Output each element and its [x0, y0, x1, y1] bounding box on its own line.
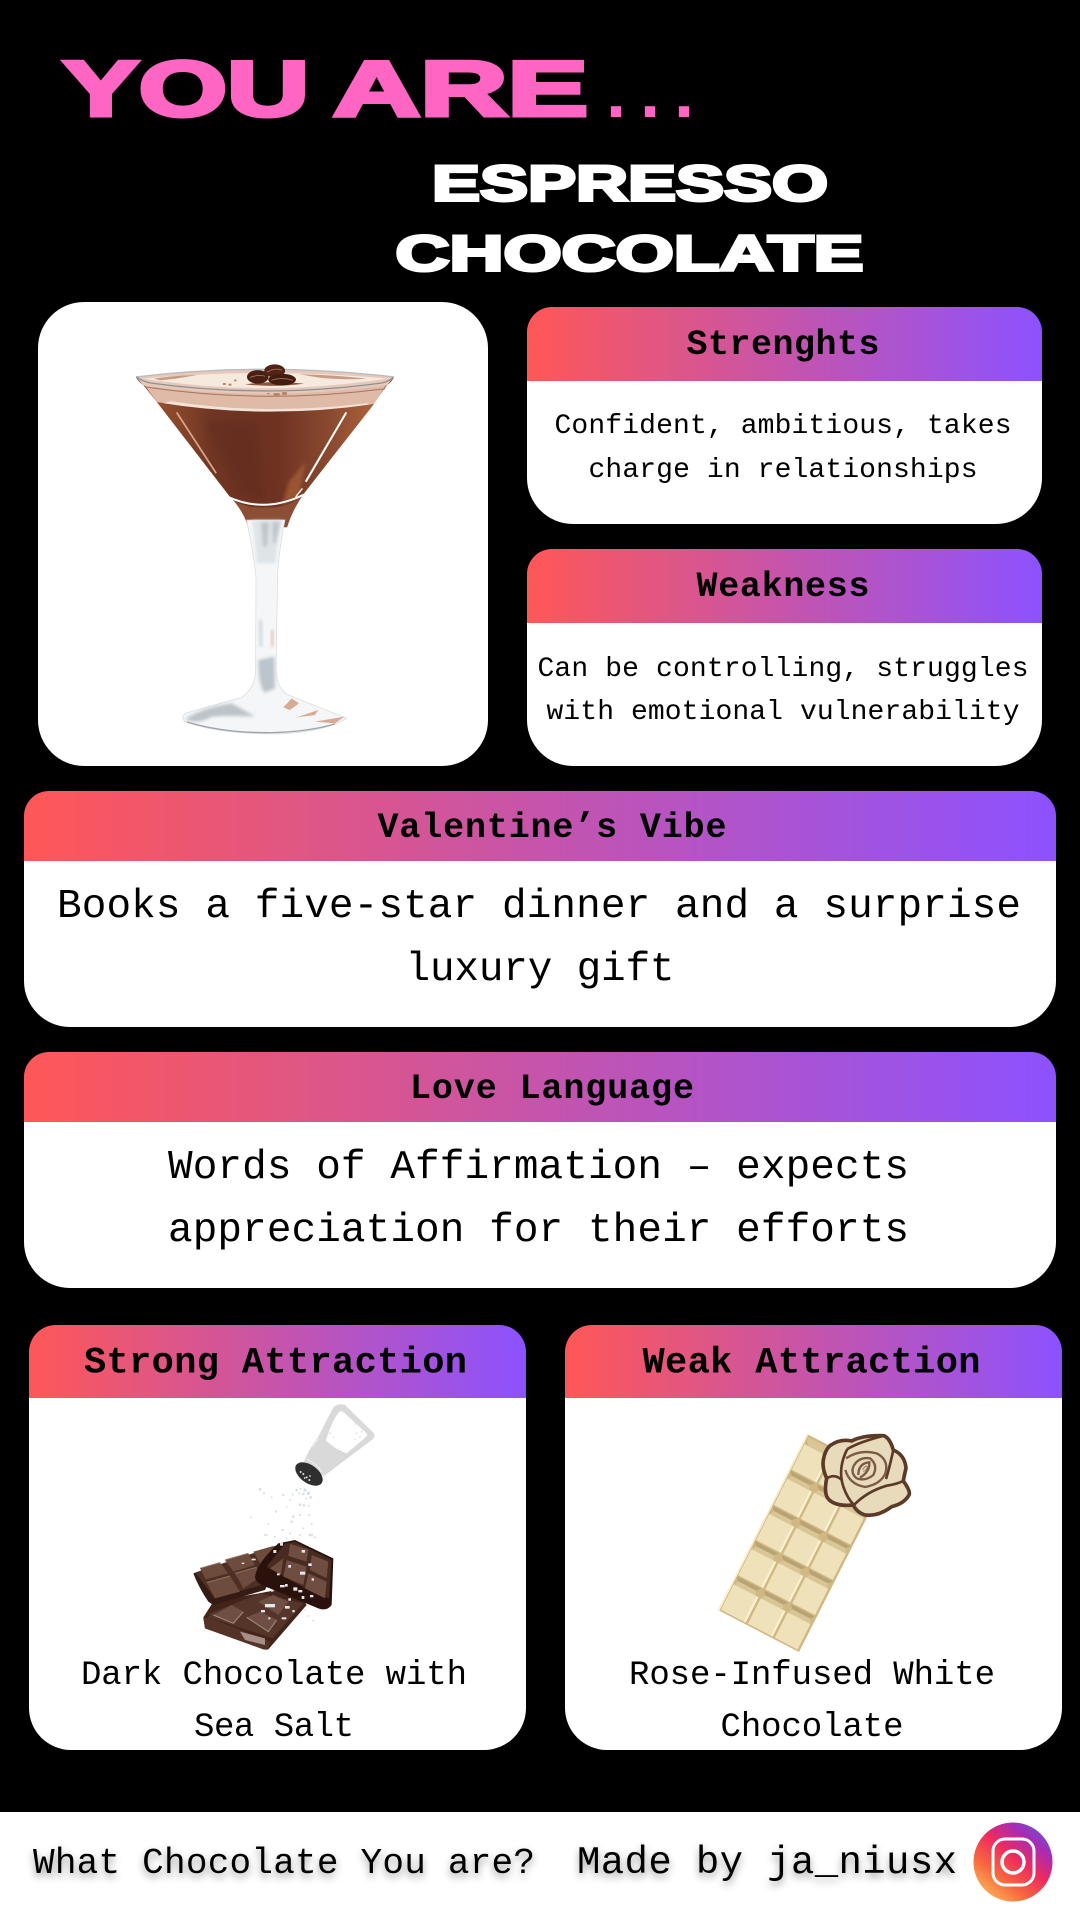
panel header: weak attraction [565, 1325, 1062, 1398]
footer text: quiz title: What Chocolate You are? [33, 1843, 535, 1884]
text: strengths body: Confident, ambitious, takes [554, 411, 1012, 442]
title: you are: YOU [63, 44, 309, 132]
icon: dark chocolate bars [193, 1532, 333, 1650]
icon: white chocolate bar [718, 1434, 888, 1652]
text: weakness body: Can be controlling, struggles [538, 654, 1028, 685]
text: weak attraction body: Rose-Infused White [629, 1657, 995, 1695]
heading: valentine's vibe: Valentine’s Vibe [378, 808, 726, 848]
panel: strong attraction [29, 1325, 526, 1750]
text: strengths body: charge in relationships [588, 455, 978, 486]
panel: weakness [527, 549, 1042, 766]
heading: espresso chocolate [396, 156, 864, 282]
icon: falling salt [250, 1488, 316, 1539]
panel: valentine's vibe [24, 791, 1056, 1027]
panel header: weakness [527, 549, 1042, 623]
glass bowl [136, 364, 394, 527]
text: love language body: Words of Affirmation – expects [168, 1145, 909, 1191]
heading: strengths: Strenghts [686, 325, 880, 365]
glass stem and foot [183, 520, 347, 734]
text: strong attraction body [81, 1657, 467, 1747]
text: weakness body: with emotional vulnerability [546, 697, 1020, 728]
panel: cocktail image [38, 302, 488, 766]
panel: strengths [527, 307, 1042, 524]
heading: weak attraction: Weak Attraction [642, 1342, 980, 1384]
text: valentine's vibe body [57, 884, 1021, 993]
panel header: love language [24, 1052, 1056, 1122]
heading: weakness: Weakness [696, 567, 870, 607]
text: weak attraction body [629, 1657, 995, 1747]
text: love language body [168, 1145, 909, 1254]
icon: instagram [974, 1822, 1052, 1902]
text: love language body: appreciation for their efforts [168, 1208, 909, 1254]
panel header: strong attraction [29, 1325, 526, 1398]
panel: weak attraction [565, 1325, 1062, 1750]
title: you are: ... [606, 53, 708, 133]
icon: espresso martini glass [136, 364, 394, 734]
text: valentine's vibe body: luxury gift [406, 947, 674, 993]
text: strong attraction body: Dark Chocolate with [81, 1657, 467, 1695]
heading: strong attraction: Strong Attraction [84, 1342, 467, 1384]
panel: love language [24, 1052, 1056, 1288]
icon: rose [823, 1436, 909, 1515]
heading: love language: Love Language [410, 1069, 694, 1109]
text: strengths body [554, 411, 1012, 486]
text: weakness body [538, 654, 1028, 728]
footer text: credit: Made by ja_niusx [577, 1841, 957, 1885]
text: valentine's vibe body: Books a five-star dinner and a surprise [57, 884, 1021, 930]
text: strong attraction body: Sea Salt [194, 1709, 354, 1747]
heading: espresso chocolate: CHOCOLATE [396, 226, 864, 282]
text: weak attraction body: Chocolate [720, 1709, 904, 1747]
panel header: valentine's vibe [24, 791, 1056, 861]
title: you are: ARE [333, 44, 588, 132]
icon: salt shaker [291, 1404, 375, 1490]
title: you are [63, 44, 708, 133]
heading: espresso chocolate: ESPRESSO [432, 156, 828, 212]
panel header: strengths [527, 307, 1042, 381]
footer bar [0, 1812, 1080, 1920]
